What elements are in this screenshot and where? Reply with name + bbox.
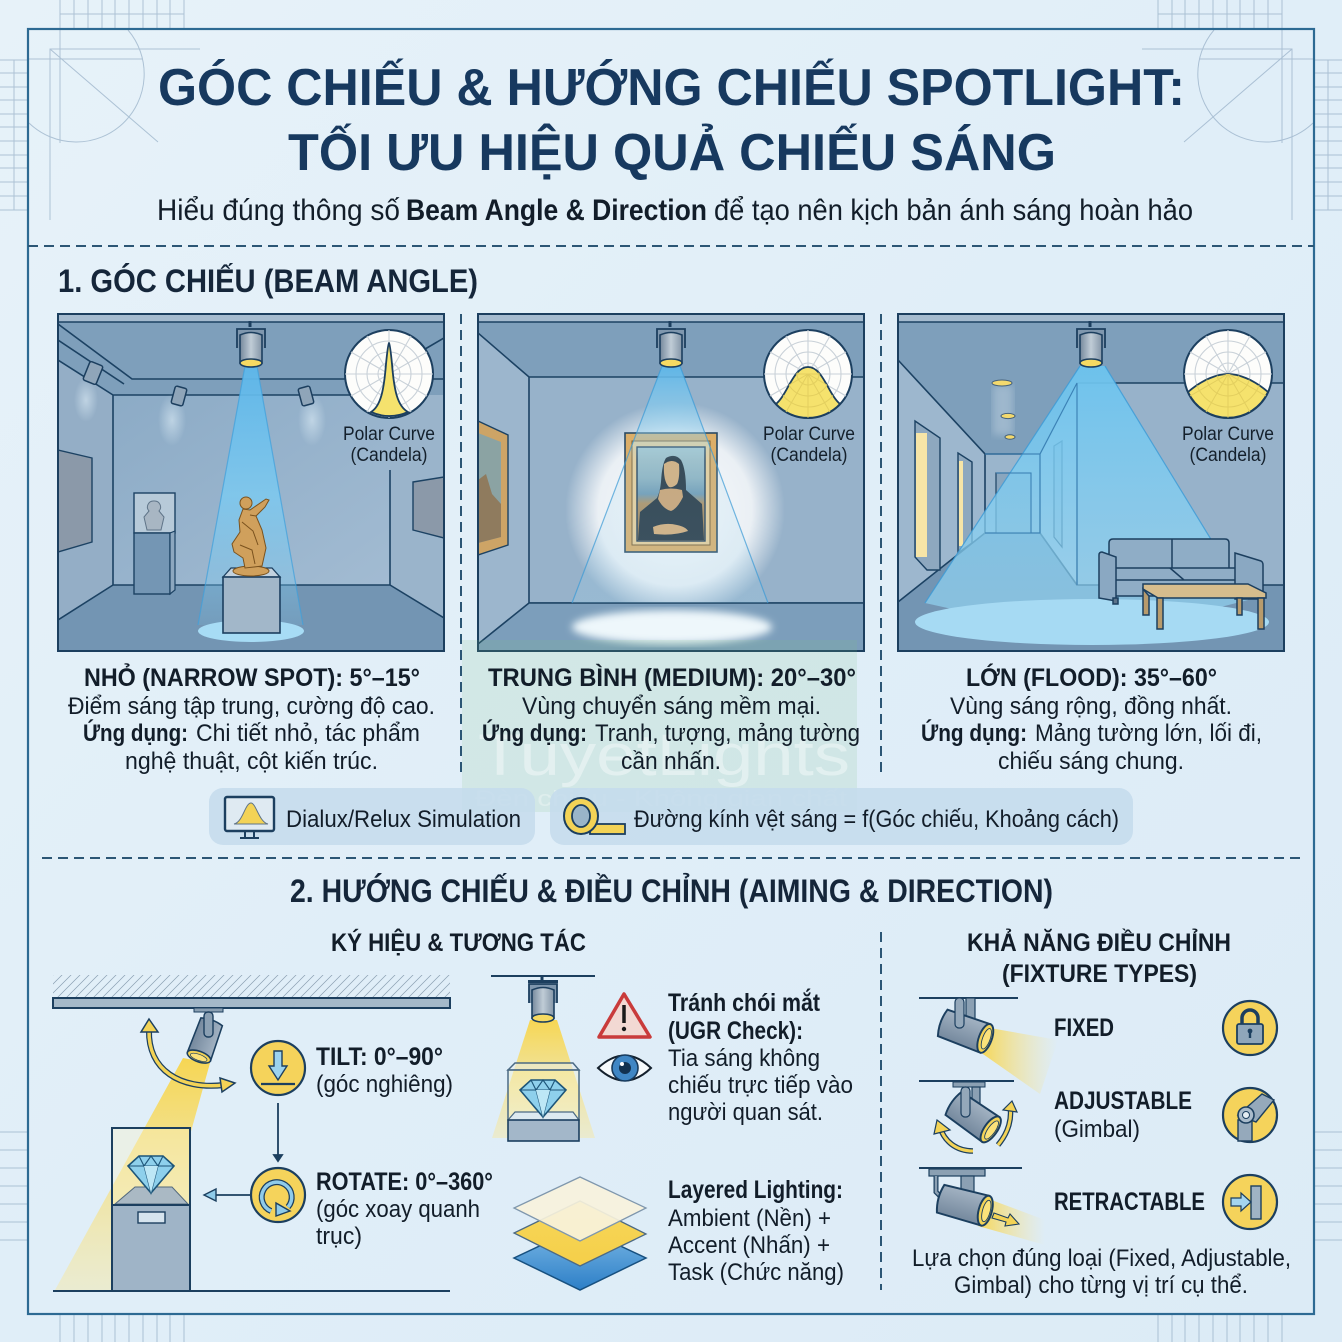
subtitle [157, 194, 1193, 227]
sofa [1099, 539, 1263, 604]
yellow beam [55, 1058, 210, 1290]
text: layered lighting: Accent (Nhấn) + [668, 1232, 830, 1259]
panel: flood scene [898, 314, 1284, 651]
text block: medium [482, 663, 860, 775]
polar label [763, 424, 855, 466]
text: fixture advice: Gimbal) cho từng vị trí cụ thể. [954, 1272, 1248, 1299]
heading: symbols: KÝ HIỆU & TƯƠNG TÁC [331, 927, 586, 957]
arrows: gimbal [934, 1101, 1017, 1151]
watermark [462, 640, 857, 812]
title: TỐI ƯU HIỆU QUẢ CHIẾU SÁNG [288, 123, 1056, 182]
tilting spotlight [186, 1008, 224, 1066]
polar label: Polar Curve [763, 424, 855, 445]
spotlight fixture [237, 321, 265, 367]
downlights [992, 380, 1015, 439]
text: glare: chiếu trực tiếp vào [668, 1072, 853, 1099]
text block: medium: TRUNG BÌNH (MEDIUM): 20°–30° [488, 663, 856, 692]
title [158, 58, 1185, 182]
wall paintings [58, 450, 444, 552]
text block: flood [921, 662, 1262, 775]
subtitle: Beam Angle & Direction [406, 194, 707, 227]
text block: medium: Vùng chuyển sáng mềm mại. [522, 693, 821, 720]
watermark: Đèn chiếu - Không gian chất [475, 786, 847, 811]
text: rotate: (góc xoay quanh [316, 1196, 480, 1223]
polar chart [1184, 330, 1272, 418]
icon: retract [1223, 1175, 1277, 1229]
arrow: down [274, 1103, 282, 1161]
text block: flood: Vùng sáng rộng, đồng nhất. [950, 693, 1232, 720]
text: tilt: (góc nghiêng) [316, 1071, 453, 1098]
side painting [478, 421, 508, 555]
labels: fixture types: ADJUSTABLE [1054, 1087, 1192, 1115]
polar label [343, 424, 435, 466]
arrow: left [215, 1194, 250, 1196]
text block: narrow spot: Điểm sáng tập trung, cường độ cao. [68, 693, 435, 720]
icon: tape measure [564, 798, 625, 834]
text block: narrow spot: Ứng dụng: [83, 719, 188, 747]
icon: gimbal joint [1223, 1088, 1277, 1142]
subtitle: để tạo nên kịch bản ánh sáng hoàn hảo [714, 194, 1193, 227]
polar label: (Candela) [1190, 445, 1266, 466]
text block: medium: Tranh, tượng, mảng tường [595, 720, 860, 747]
labels: fixture types: (Gimbal) [1054, 1116, 1140, 1143]
polar chart [764, 330, 852, 418]
text block: medium: cần nhấn. [621, 748, 721, 775]
polar label: Polar Curve [343, 424, 435, 445]
text: glare: người quan sát. [668, 1099, 823, 1126]
labels: fixture types [1054, 1014, 1205, 1216]
pedestal [223, 568, 280, 633]
panel: medium scene [478, 314, 864, 651]
text: glare: (UGR Check): [668, 1017, 803, 1045]
text: layered lighting: Task (Chức năng) [668, 1259, 844, 1286]
polar label: Polar Curve [1182, 424, 1274, 445]
polar label: (Candela) [350, 445, 428, 466]
text: rotate [316, 1168, 493, 1250]
polar chart [345, 330, 433, 418]
text: layered lighting: Layered Lighting: [668, 1176, 843, 1204]
icon: monitor [225, 797, 274, 838]
text block: flood: Ứng dụng: [921, 719, 1027, 747]
mona lisa painting [625, 433, 717, 552]
heading: section 2: 2. HƯỚNG CHIẾU & ĐIỀU CHỈNH (AIMING & DIRECTION) [290, 873, 1053, 909]
text: glare [668, 987, 853, 1126]
small track lights [74, 361, 326, 446]
heading: fixture types: (FIXTURE TYPES) [1002, 960, 1197, 988]
diagram: tilt and rotate [53, 975, 450, 1291]
text block: flood: chiếu sáng chung. [998, 748, 1184, 775]
fixture: adjustable [919, 1081, 1017, 1151]
watermark: TuyetLights [478, 723, 850, 788]
diagram: showcase glare [491, 976, 595, 1141]
medium beam [572, 366, 768, 603]
title: GÓC CHIẾU & HƯỚNG CHIẾU SPOTLIGHT: [158, 58, 1185, 117]
text: fixture advice [912, 1245, 1291, 1299]
panel: narrow spot scene [58, 314, 444, 651]
labels: fixture types: FIXED [1054, 1014, 1114, 1042]
icon: eye [598, 1055, 651, 1081]
subtitle: Hiểu đúng thông số [157, 194, 400, 227]
spotlight fixture [1077, 321, 1105, 367]
icon: rotate [251, 1168, 305, 1222]
text: tilt: TILT: 0°–90° [316, 1043, 443, 1071]
text block: flood: LỚN (FLOOD): 35°–60° [966, 662, 1217, 692]
text block: narrow spot: NHỎ (NARROW SPOT): 5°–15° [84, 662, 420, 692]
text: glare: Tránh chói mắt [668, 987, 821, 1017]
text: glare: Tia sáng không [668, 1045, 820, 1072]
wall glow [568, 408, 782, 602]
glass showcase [134, 493, 175, 594]
text: rotate: ROTATE: 0°–360° [316, 1168, 493, 1196]
polar label [1182, 424, 1274, 466]
icon: lock [1223, 1001, 1277, 1055]
text: rotate: trục) [316, 1223, 362, 1250]
heading: fixture types [967, 927, 1231, 988]
text: fixture advice: Lựa chọn đúng loại (Fixed, Adjustable, [912, 1245, 1291, 1272]
flood beam [926, 366, 1248, 608]
text: layered lighting: Ambient (Nền) + [668, 1205, 831, 1232]
arrow: tilt arc [141, 1019, 235, 1092]
narrow beam [198, 366, 303, 625]
spotlight fixture [657, 321, 685, 367]
corridor doors [915, 421, 1062, 570]
icon: tilt [251, 1041, 305, 1095]
text: layered lighting [668, 1176, 844, 1286]
text block: narrow spot: Chi tiết nhỏ, tác phẩm [196, 720, 420, 747]
display case [112, 1128, 190, 1291]
text: tilt [316, 1043, 453, 1098]
fixture: retractable [919, 1168, 1045, 1245]
coffee table [1143, 584, 1266, 629]
fixture: fixed [919, 998, 1058, 1094]
text block: flood: Mảng tường lớn, lối đi, [1035, 720, 1262, 747]
text block: medium: Ứng dụng: [482, 719, 587, 747]
polar label: (Candela) [770, 445, 848, 466]
heading: section 1: 1. GÓC CHIẾU (BEAM ANGLE) [58, 263, 478, 299]
pill: simulation [209, 788, 535, 845]
statue [232, 497, 269, 576]
icon: layered lighting [514, 1177, 646, 1290]
icon: warning triangle [599, 994, 650, 1037]
pill: beam diameter [550, 788, 1133, 845]
text block: narrow spot: nghệ thuật, cột kiến trúc. [125, 748, 378, 775]
text block: narrow spot [68, 662, 435, 775]
pill: beam diameter: Đường kính vệt sáng = f(Góc chiếu, Khoảng cách) [634, 806, 1119, 833]
labels: fixture types: RETRACTABLE [1054, 1188, 1205, 1216]
pill: simulation: Dialux/Relux Simulation [286, 806, 521, 833]
heading: fixture types: KHẢ NĂNG ĐIỀU CHỈNH [967, 927, 1231, 957]
